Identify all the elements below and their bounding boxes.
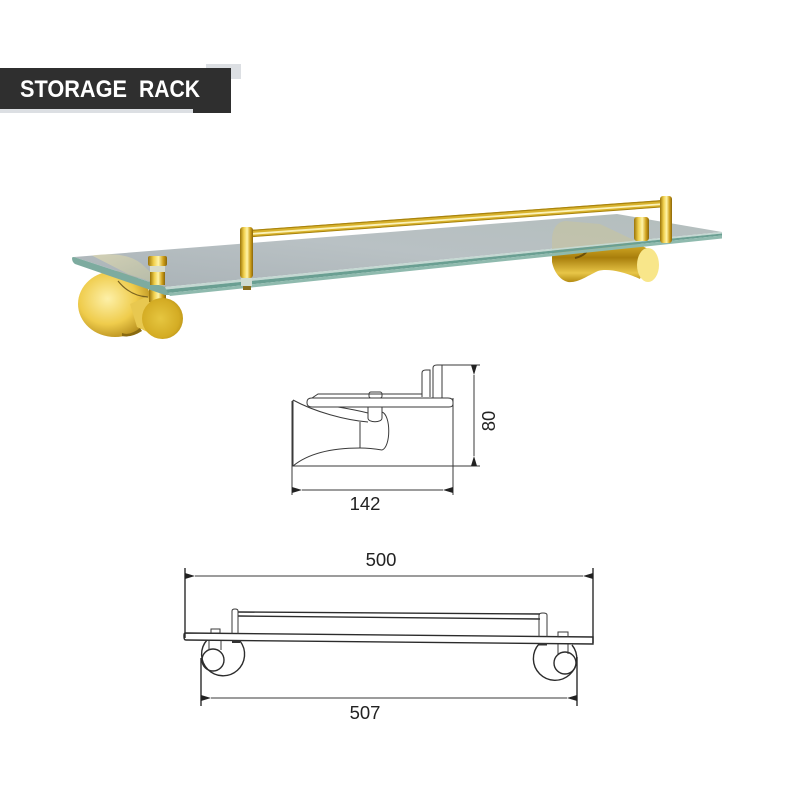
right wall bracket [552, 221, 659, 282]
dimension 500: 500 [366, 549, 396, 570]
dimension 80: 80 [478, 411, 499, 431]
dimension 507: 507 [350, 702, 380, 723]
dimension 80 [292, 365, 499, 466]
glass clamp right [634, 217, 649, 241]
dimension 507 [201, 657, 577, 723]
glass shelf [72, 214, 722, 297]
dimension 500 [185, 549, 593, 643]
wall brackets [202, 640, 577, 680]
title: RACK [139, 76, 201, 103]
rail [232, 609, 547, 637]
side view drawing [292, 365, 499, 514]
title: STORAGE [20, 76, 127, 103]
title banner [0, 64, 241, 113]
shelf [184, 629, 593, 646]
shelf outline [307, 365, 453, 407]
bracket outline [293, 400, 389, 466]
front view drawing [184, 549, 593, 723]
glass clamp left [148, 256, 167, 285]
dimension 142: 142 [350, 493, 380, 514]
product photo: gold glass shelf [72, 196, 722, 339]
dimension 142 [292, 398, 453, 514]
left wall bracket [78, 270, 183, 339]
gold rail [240, 196, 672, 290]
